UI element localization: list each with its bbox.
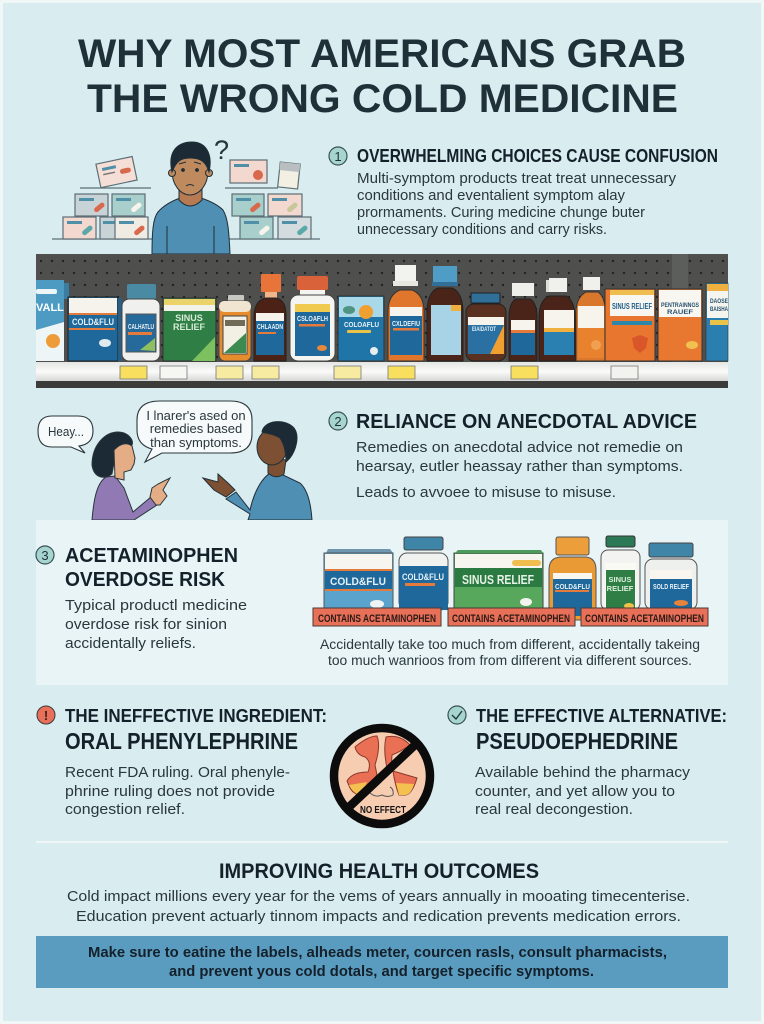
speech bubble: remedies: I lnarer's ased on <box>146 408 246 423</box>
illustration: two people talking <box>38 401 312 520</box>
outcomes text: Education prevent actuarly tinnom impacts and redication prevents medication errors. <box>76 908 681 925</box>
body text: congestion relief. <box>65 801 185 818</box>
panel: acetaminophen overdose risk <box>36 520 728 685</box>
product: Sinus Relief orange box <box>605 289 655 361</box>
product: Sinus Relief green box: RELIEF <box>173 322 205 332</box>
woman <box>92 432 170 520</box>
heading: improving health outcomes: IMPROVING HEALTH OUTCOMES <box>219 860 539 883</box>
product: amber bottle orange cap: CHLAADN <box>257 324 283 331</box>
section 1 body text: unnecessary conditions and carry risks. <box>357 222 607 238</box>
title: THE WRONG COLD MEDICINE <box>87 77 678 121</box>
product: brown bottle striped cap <box>427 266 463 361</box>
product: Vall box: VALL <box>36 302 64 314</box>
icon: nasal sinuses with no-effect prohibition sign <box>334 728 430 824</box>
section 3 body text: overdose risk for sinion <box>65 616 227 633</box>
section 1 body text: conditions and eventalient symptom alay <box>357 188 626 204</box>
product: orange relief box: PENTRAINNGS <box>661 302 700 309</box>
product: Sinus Relief green box: SINUS <box>175 313 203 323</box>
product: orange bottle <box>576 277 605 361</box>
product: orange bottle: COLD&FLU <box>555 582 590 591</box>
section 3 body text: accidentally reliefs. <box>65 635 196 652</box>
product: orange bottle white cap <box>388 265 424 361</box>
speech bubble: Heay: Heay... <box>48 424 84 439</box>
product: green cap bottle: RELIEF <box>607 584 634 593</box>
section 2 heading: RELIANCE ON ANECDOTAL ADVICE <box>356 411 697 433</box>
section 1 body text <box>357 171 677 238</box>
product: blue cap bottle <box>399 537 448 610</box>
section 2 number badge: 2 <box>334 414 342 429</box>
section 1 number badge: 1 <box>334 149 342 164</box>
body text: Recent FDA ruling. Oral phenyle- <box>65 764 290 781</box>
warning label: CONTAINS ACETAMINOPHEN <box>585 613 704 625</box>
product: green cap bottle: SINUS <box>609 575 631 584</box>
product: amber bottle orange cap <box>254 274 286 361</box>
banner: call to action: Make sure to eatine the labels, alheads meter, courcen rasls, consult pharmacists, <box>88 944 667 961</box>
warning label <box>313 608 441 626</box>
body text: Available behind the pharmacy <box>475 764 691 781</box>
product: Sinus Relief box <box>454 550 543 610</box>
drug name: ORAL PHENYLEPHRINE <box>65 728 298 754</box>
product: Cold and Flu box <box>68 297 122 361</box>
panel: ineffective ingredient <box>37 705 327 818</box>
product: white bottle teal cap <box>122 284 160 361</box>
product: blue box right edge <box>706 283 729 361</box>
section 3 number badge <box>36 546 54 564</box>
speech bubble: remedies <box>137 401 252 462</box>
speech bubble: Heay <box>38 416 93 453</box>
question mark: ? <box>214 135 229 165</box>
section 2 body text: Remedies on anecdotal advice not remedie on <box>356 439 683 456</box>
product: small orange bottle <box>219 295 251 361</box>
product: blue box with orange: COLOAFLU <box>344 322 379 329</box>
product: Sinus Relief orange box: SINUS RELIEF <box>612 302 652 311</box>
product: brown jar <box>466 293 506 361</box>
panel: pharmacy shelf with products <box>36 254 729 388</box>
section 1 body text: prormaments. Curing medicine chunge buter <box>357 205 645 221</box>
warning label <box>581 608 708 626</box>
product: Sinus Relief box: SINUS RELIEF <box>462 572 534 587</box>
speech bubble: remedies: remedies based <box>150 421 242 436</box>
product: Vall box <box>36 280 69 361</box>
body text: phrine ruling does not provide <box>65 783 275 800</box>
product: blue box right edge: BAISHA <box>710 307 729 313</box>
section 2 body text: hearsay, eutler heassay rather than symptoms. <box>356 458 683 475</box>
product: blue box right edge: DAOSE <box>710 299 728 305</box>
product: orange relief box <box>658 289 702 361</box>
product: paired brown bottles <box>539 278 575 361</box>
product: white bottle teal cap: CALHATLU <box>128 324 154 331</box>
man <box>203 422 312 520</box>
product: blue cap white bottle: SOLD RELIEF <box>653 582 689 591</box>
warning label: CONTAINS ACETAMINOPHEN <box>452 613 570 625</box>
product: blue cap bottle: COLD&FLU <box>402 572 444 582</box>
body text <box>475 764 691 818</box>
shelf price tags <box>120 366 638 379</box>
product: Sinus Relief green box <box>163 298 216 361</box>
body text: real real decongestion. <box>475 801 633 818</box>
speech bubble: remedies: than symptoms. <box>150 435 242 450</box>
section 2 number badge <box>329 412 347 430</box>
illustration: confused shopper between medicine boxes <box>52 135 320 254</box>
product: white bottle orange cap <box>290 276 335 361</box>
check icon <box>448 706 466 724</box>
product: blue box with orange <box>338 296 384 361</box>
outcomes text <box>67 888 690 925</box>
acetaminophen caption: too much wanrioos from from different via different sources. <box>328 653 692 668</box>
acetaminophen caption <box>320 637 700 668</box>
banner: call to action: and prevent yous cold dotals, and target specific symptoms. <box>169 963 594 980</box>
product: white bottle orange cap: CSLOAFLH <box>297 314 328 323</box>
product: blue cap white bottle <box>645 543 697 610</box>
heading: THE INEFFECTIVE INGREDIENT: <box>65 705 327 726</box>
person <box>152 142 230 254</box>
product: green cap bottle <box>601 536 640 610</box>
warning label <box>448 608 575 626</box>
title: WHY MOST AMERICANS GRAB <box>78 32 686 76</box>
product: Cold and Flu box <box>324 549 393 610</box>
section 3 body text: Typical productl medicine <box>65 597 247 614</box>
heading: THE EFFECTIVE ALTERNATIVE: <box>476 705 727 726</box>
product: brown jar: EIAIDATOT <box>472 327 496 333</box>
product: orange relief box: RAUEF <box>667 309 693 316</box>
section 3 body text <box>65 597 247 652</box>
body text: counter, and yet allow you to <box>475 783 675 800</box>
drug name: PSEUDOEPHEDRINE <box>476 728 678 754</box>
panel: effective alternative <box>448 705 727 818</box>
acetaminophen caption: Accidentally take too much from different, accidentally takeing <box>320 637 700 652</box>
warning icon <box>37 706 55 724</box>
body text <box>65 764 290 818</box>
icon: nasal sinuses with no-effect prohibition sign: NO EFFECT <box>360 805 406 816</box>
product: small brown bottle <box>509 283 537 361</box>
shelf ledge <box>36 362 728 388</box>
section 3 heading <box>65 545 238 591</box>
section 3 heading: ACETAMINOPHEN <box>65 545 238 567</box>
warning label: CONTAINS ACETAMINOPHEN <box>318 613 436 625</box>
product: Cold and Flu box: COLD&FLU <box>72 317 114 327</box>
product: Cold and Flu box: COLD&FLU <box>330 576 386 588</box>
title <box>78 32 686 121</box>
section 2 body text: Leads to avvoee to misuse to misuse. <box>356 484 616 501</box>
product: orange bottle white cap: CXLDEFIU <box>392 319 420 328</box>
section 1 number badge <box>329 147 347 165</box>
outcomes text: Cold impact millions every year for the vems of years annually in mooating timecenterise. <box>67 888 690 905</box>
warning icon: ! <box>44 708 48 723</box>
section 3 number badge: 3 <box>41 548 49 563</box>
section 1 body text: Multi-symptom products treat treat unnecessary <box>357 171 677 187</box>
section 2 body text <box>356 439 683 501</box>
product: orange bottle <box>549 537 596 620</box>
banner: call to action <box>36 936 728 988</box>
section 3 heading: OVERDOSE RISK <box>65 569 226 591</box>
